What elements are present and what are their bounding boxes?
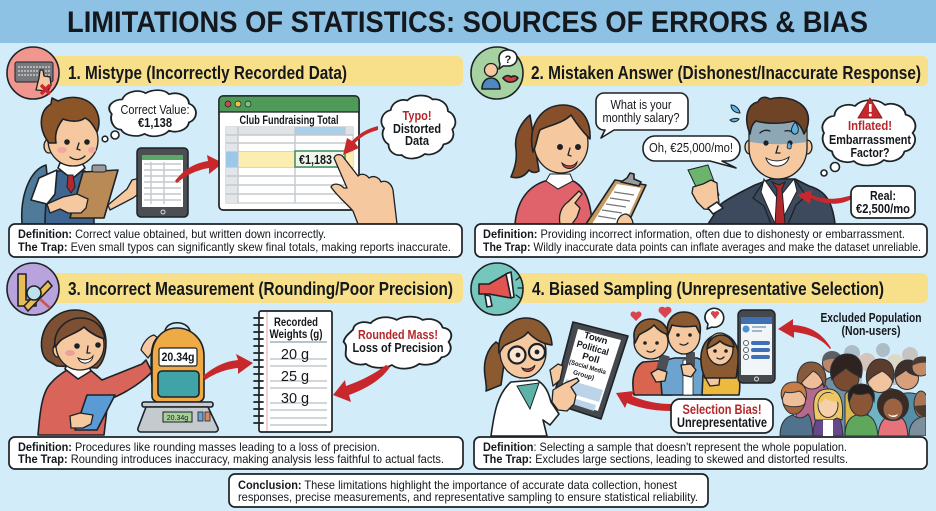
illustration: backpack on scale: 20.34g	[167, 415, 188, 422]
callout: rounded mass: Rounded Mass!	[358, 327, 438, 342]
label box: selection bias: Selection Bias!	[682, 402, 762, 417]
speech bubble: salary question: monthly salary?	[602, 110, 680, 125]
callout: typo distorted data: Typo!	[402, 108, 432, 123]
conclusion box: responses, precise measurements, and representative sampling to ensure statistical reliability.	[238, 490, 698, 504]
conclusion box	[229, 474, 708, 507]
callout: rounded mass	[344, 317, 451, 369]
notebook: recorded weights	[254, 311, 332, 432]
spreadsheet window: club fundraising total: €1,183	[299, 152, 332, 167]
speech bubble: inflated answer	[643, 136, 740, 168]
heading bar: biased sampling	[510, 273, 928, 303]
illustration: sweating man in suit	[688, 97, 835, 224]
speech bubble: inflated answer: Oh, €25,000/mo!	[649, 140, 733, 155]
illustration: researcher with poll tablet: Town	[583, 330, 609, 347]
definition box: mistype: The Trap: Even small typos can significantly skew final totals, making reports inaccurate.	[18, 240, 451, 254]
definition box: biased sampling	[474, 437, 927, 469]
label box: real salary: €2,500/mo	[856, 201, 910, 216]
definition box: biased sampling: Definition: Selecting a sample that doesn't represent the whole population.	[483, 440, 847, 454]
definition box: mistype: Definition: Correct value obtained, but written down incorrectly.	[18, 227, 326, 241]
illustration: pointing hand	[331, 155, 397, 224]
illustration: crowd of excluded people	[780, 343, 930, 436]
arrow: selection bias to tablet	[616, 391, 672, 411]
illustration: woman weighing backpack	[38, 310, 158, 435]
title banner: LIMITATIONS OF STATISTICS: SOURCES OF ERRORS & BIAS	[67, 6, 868, 39]
notebook: recorded weights: 25 g	[281, 369, 309, 385]
notebook: recorded weights: 30 g	[281, 391, 309, 407]
label box: real salary	[851, 186, 915, 218]
illustration: backpack on scale	[138, 323, 218, 432]
label box: selection bias	[671, 399, 773, 433]
label box: real salary: Real:	[870, 188, 896, 203]
illustration: tablet	[137, 148, 188, 217]
heading bar: mistype: 1. Mistype (Incorrectly Recorded Data)	[68, 63, 347, 83]
thought bubble: correct value: Correct Value:	[120, 102, 190, 117]
heading bar: incorrect measurement	[44, 273, 463, 303]
panel: 2 mistaken answer	[471, 47, 928, 257]
thought bubble: correct value	[102, 90, 196, 142]
icon: person with question and lips	[471, 47, 523, 99]
definition box: mistype	[9, 224, 462, 257]
arrow: callout to notebook	[333, 365, 390, 402]
callout: inflated embarrassment factor: Inflated!	[848, 118, 892, 133]
notebook: recorded weights: Recorded	[274, 315, 318, 329]
illustration: backpack on scale: 20.34g	[162, 350, 194, 364]
illustration: researcher with poll tablet: Group)	[572, 369, 595, 382]
arrow: backpack to notebook	[203, 354, 253, 380]
label: excluded population: (Non-users)	[842, 324, 900, 338]
arrow: typo to cell	[343, 126, 378, 155]
illustration: group of phone users	[631, 307, 740, 395]
callout: inflated embarrassment factor: Factor?	[850, 145, 890, 160]
arrow: excluded population to phone	[778, 319, 831, 349]
illustration: interviewer woman	[511, 105, 646, 224]
callout: typo distorted data: Data	[405, 133, 430, 148]
conclusion box: Conclusion: These limitations highlight the importance of accurate data collection, honest	[238, 478, 678, 492]
heading bar: mistype	[44, 56, 463, 86]
definition box: biased sampling: The Trap: Excludes large sections, leading to skewed and distorted results.	[483, 452, 848, 466]
panel: 4 biased sampling	[471, 263, 930, 469]
callout: typo distorted data: Distorted	[393, 121, 441, 136]
callout: typo distorted data	[381, 96, 455, 159]
thought bubble: correct value: €1,138	[138, 115, 172, 130]
arrow: tablet to spreadsheet	[175, 155, 223, 183]
illustration: phone with social media poll	[738, 310, 775, 383]
icon: megaphone	[471, 263, 523, 315]
callout: inflated embarrassment factor: Embarrassment	[829, 132, 912, 147]
heading bar: mistaken answer	[510, 56, 928, 86]
illustration: researcher with poll tablet: Poll	[581, 351, 601, 366]
heading bar: biased sampling: 4. Biased Sampling (Unrepresentative Selection)	[532, 279, 884, 299]
speech bubble: salary question	[596, 93, 688, 138]
notebook: recorded weights: 20 g	[281, 347, 309, 363]
icon: person with question and lips: ?	[505, 54, 512, 66]
panel: 1 mistype	[7, 47, 463, 257]
definition box: incorrect measurement: The Trap: Rounding introduces inaccuracy, making analysis less faithful to actual facts.	[18, 452, 444, 466]
speech bubble: salary question: What is your	[610, 97, 672, 112]
definition box: mistaken answer: Definition: Providing incorrect information, often due to dishonesty or embarrassment.	[483, 227, 905, 241]
definition box: incorrect measurement: Definition: Procedures like rounding masses leading to a loss of precision.	[18, 440, 380, 454]
label box: selection bias: Unrepresentative	[677, 415, 767, 430]
illustration: researcher with poll tablet	[484, 318, 628, 436]
panel: 3 incorrect measurement	[7, 263, 463, 469]
spreadsheet window: club fundraising total	[219, 96, 359, 210]
callout: inflated embarrassment factor	[821, 98, 915, 176]
icon: keyboard with error cross	[7, 47, 59, 99]
icon: rulers and magnifier	[7, 263, 59, 315]
definition box: incorrect measurement	[9, 437, 463, 469]
illustration: student with clipboard	[22, 97, 145, 224]
illustration: researcher with poll tablet: (Social Media	[568, 359, 607, 376]
callout: rounded mass: Loss of Precision	[352, 340, 444, 355]
arrow: real value to man	[797, 190, 852, 204]
spreadsheet window: club fundraising total: Club Fundraising Total	[240, 113, 338, 127]
label: excluded population	[820, 311, 922, 338]
notebook: recorded weights: Weights (g)	[270, 327, 322, 341]
heading bar: incorrect measurement: 3. Incorrect Measurement (Rounding/Poor Precision)	[68, 279, 453, 299]
definition box: mistaken answer	[475, 224, 927, 257]
illustration: researcher with poll tablet: Political	[575, 339, 610, 358]
